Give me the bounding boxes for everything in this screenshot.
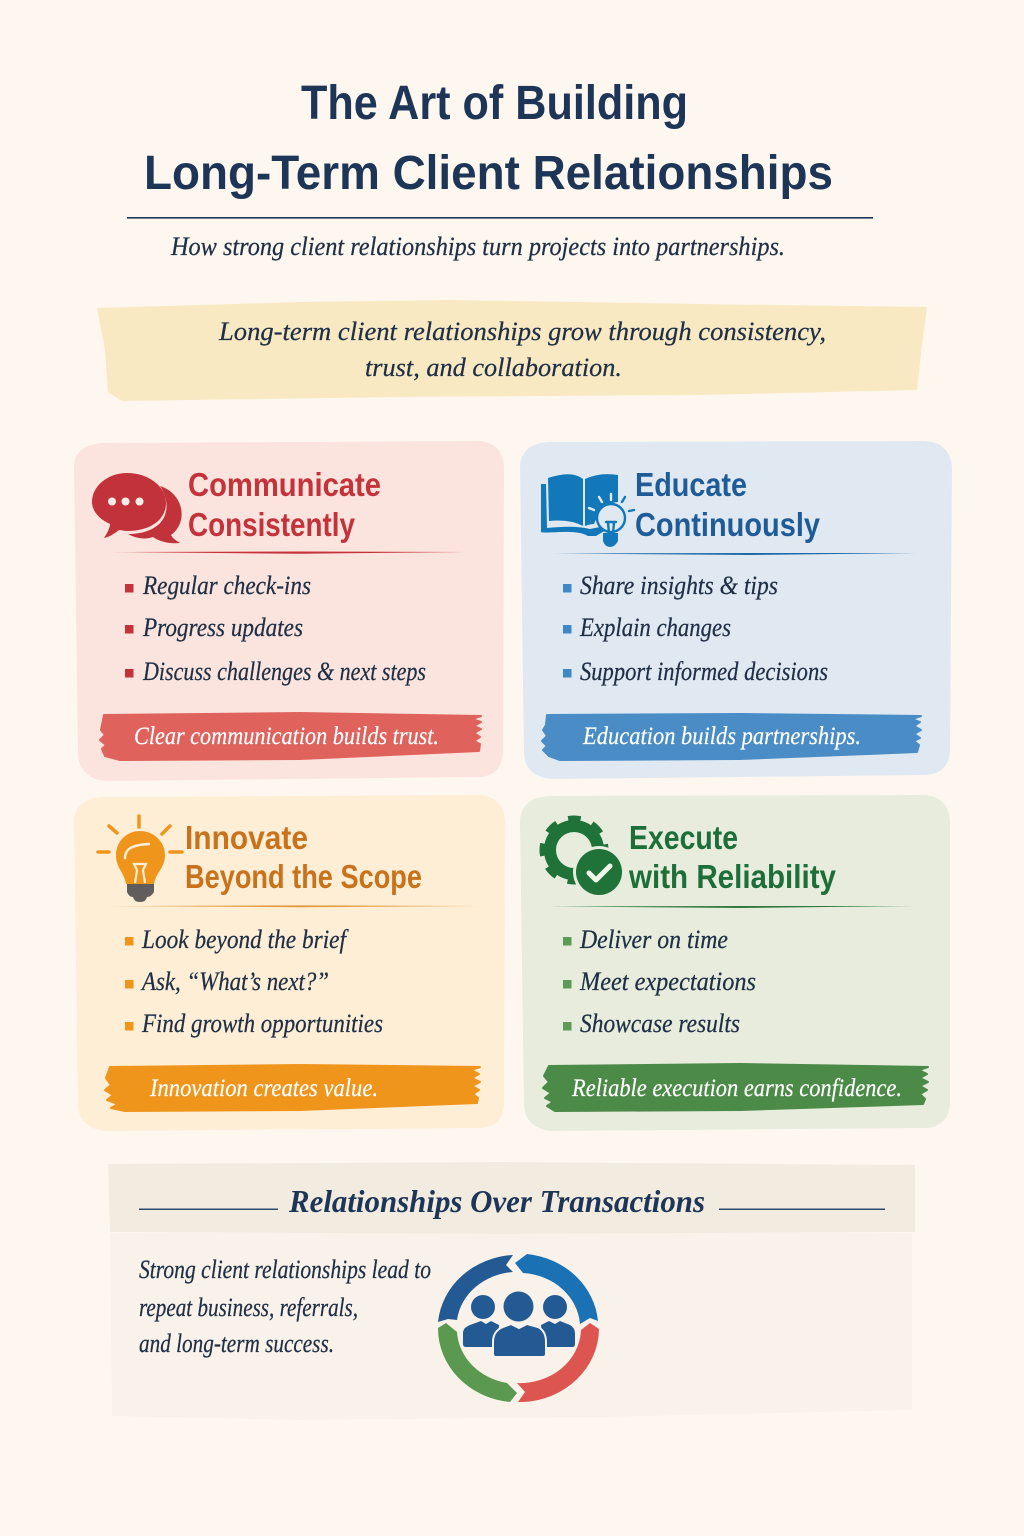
panel: innovate beyond the scope (74, 795, 505, 1131)
bullet list: Look beyond the brief (141, 925, 349, 954)
text block: and long-term success. (139, 1329, 334, 1358)
bullet list: Share insights & tips (580, 571, 778, 600)
heading: Beyond the Scope (185, 858, 422, 895)
icon: gear with check mark (543, 819, 625, 898)
heading: with Reliability (628, 858, 837, 895)
heading: Execute (629, 819, 738, 856)
icon: open book with light bulb (541, 474, 634, 547)
icon: light bulb (98, 816, 182, 902)
heading (635, 466, 821, 543)
bullet list: Explain changes (579, 613, 731, 642)
callout: Reliable execution earns confidence. (571, 1075, 902, 1102)
callout: Innovation creates value. (149, 1075, 378, 1102)
bullet list (125, 571, 426, 686)
bullet list: Regular check-ins (142, 571, 311, 600)
banner: key message (97, 300, 927, 401)
text block: repeat business, referrals, (139, 1293, 358, 1322)
title: Long-Term Client Relationships (144, 147, 833, 200)
bullet list: Deliver on time (579, 925, 728, 954)
heading: Innovate (185, 819, 308, 856)
text block (139, 1255, 431, 1358)
callout (105, 1065, 480, 1111)
callout (543, 1064, 928, 1111)
heading (188, 466, 381, 543)
bullet list (563, 571, 828, 686)
heading: Educate (635, 466, 747, 503)
bullet list: Ask, “What’s next?” (140, 967, 329, 996)
icon: speech bubbles (92, 473, 182, 543)
heading: Continuously (635, 506, 821, 543)
title: The Art of Building (301, 77, 688, 130)
title (144, 77, 833, 200)
bullet list: Meet expectations (579, 967, 756, 996)
bullet list: Progress updates (142, 613, 303, 642)
bullet list (563, 925, 756, 1038)
heading (185, 819, 422, 895)
banner: key message: Long-term client relationships grow through consistency, (218, 317, 826, 346)
subtitle: How strong client relationships turn projects into partnerships. (170, 232, 785, 261)
heading: Consistently (188, 506, 356, 543)
banner: key message: trust, and collaboration. (365, 353, 622, 382)
panel: educate continuously (520, 441, 952, 779)
header band (108, 1162, 915, 1234)
panel: communicate consistently (74, 441, 504, 781)
bullet list: Showcase results (580, 1009, 740, 1038)
callout (100, 713, 481, 760)
bullet list: Find growth opportunities (141, 1009, 383, 1038)
bullet list (125, 925, 383, 1038)
panel: execute with reliability (520, 795, 950, 1131)
text block: Strong client relationships lead to (139, 1255, 431, 1284)
icon: team in circular arrows (438, 1254, 599, 1402)
callout (542, 714, 921, 760)
bullet list: Discuss challenges & next steps (142, 657, 426, 686)
bullet list: Support informed decisions (580, 657, 828, 686)
heading (628, 819, 837, 895)
callout: Education builds partnerships. (582, 723, 861, 750)
heading: Communicate (188, 466, 381, 503)
panel: relationships over transactions (108, 1162, 915, 1420)
callout: Clear communication builds trust. (134, 723, 439, 750)
header band: Relationships Over Transactions (288, 1183, 705, 1219)
